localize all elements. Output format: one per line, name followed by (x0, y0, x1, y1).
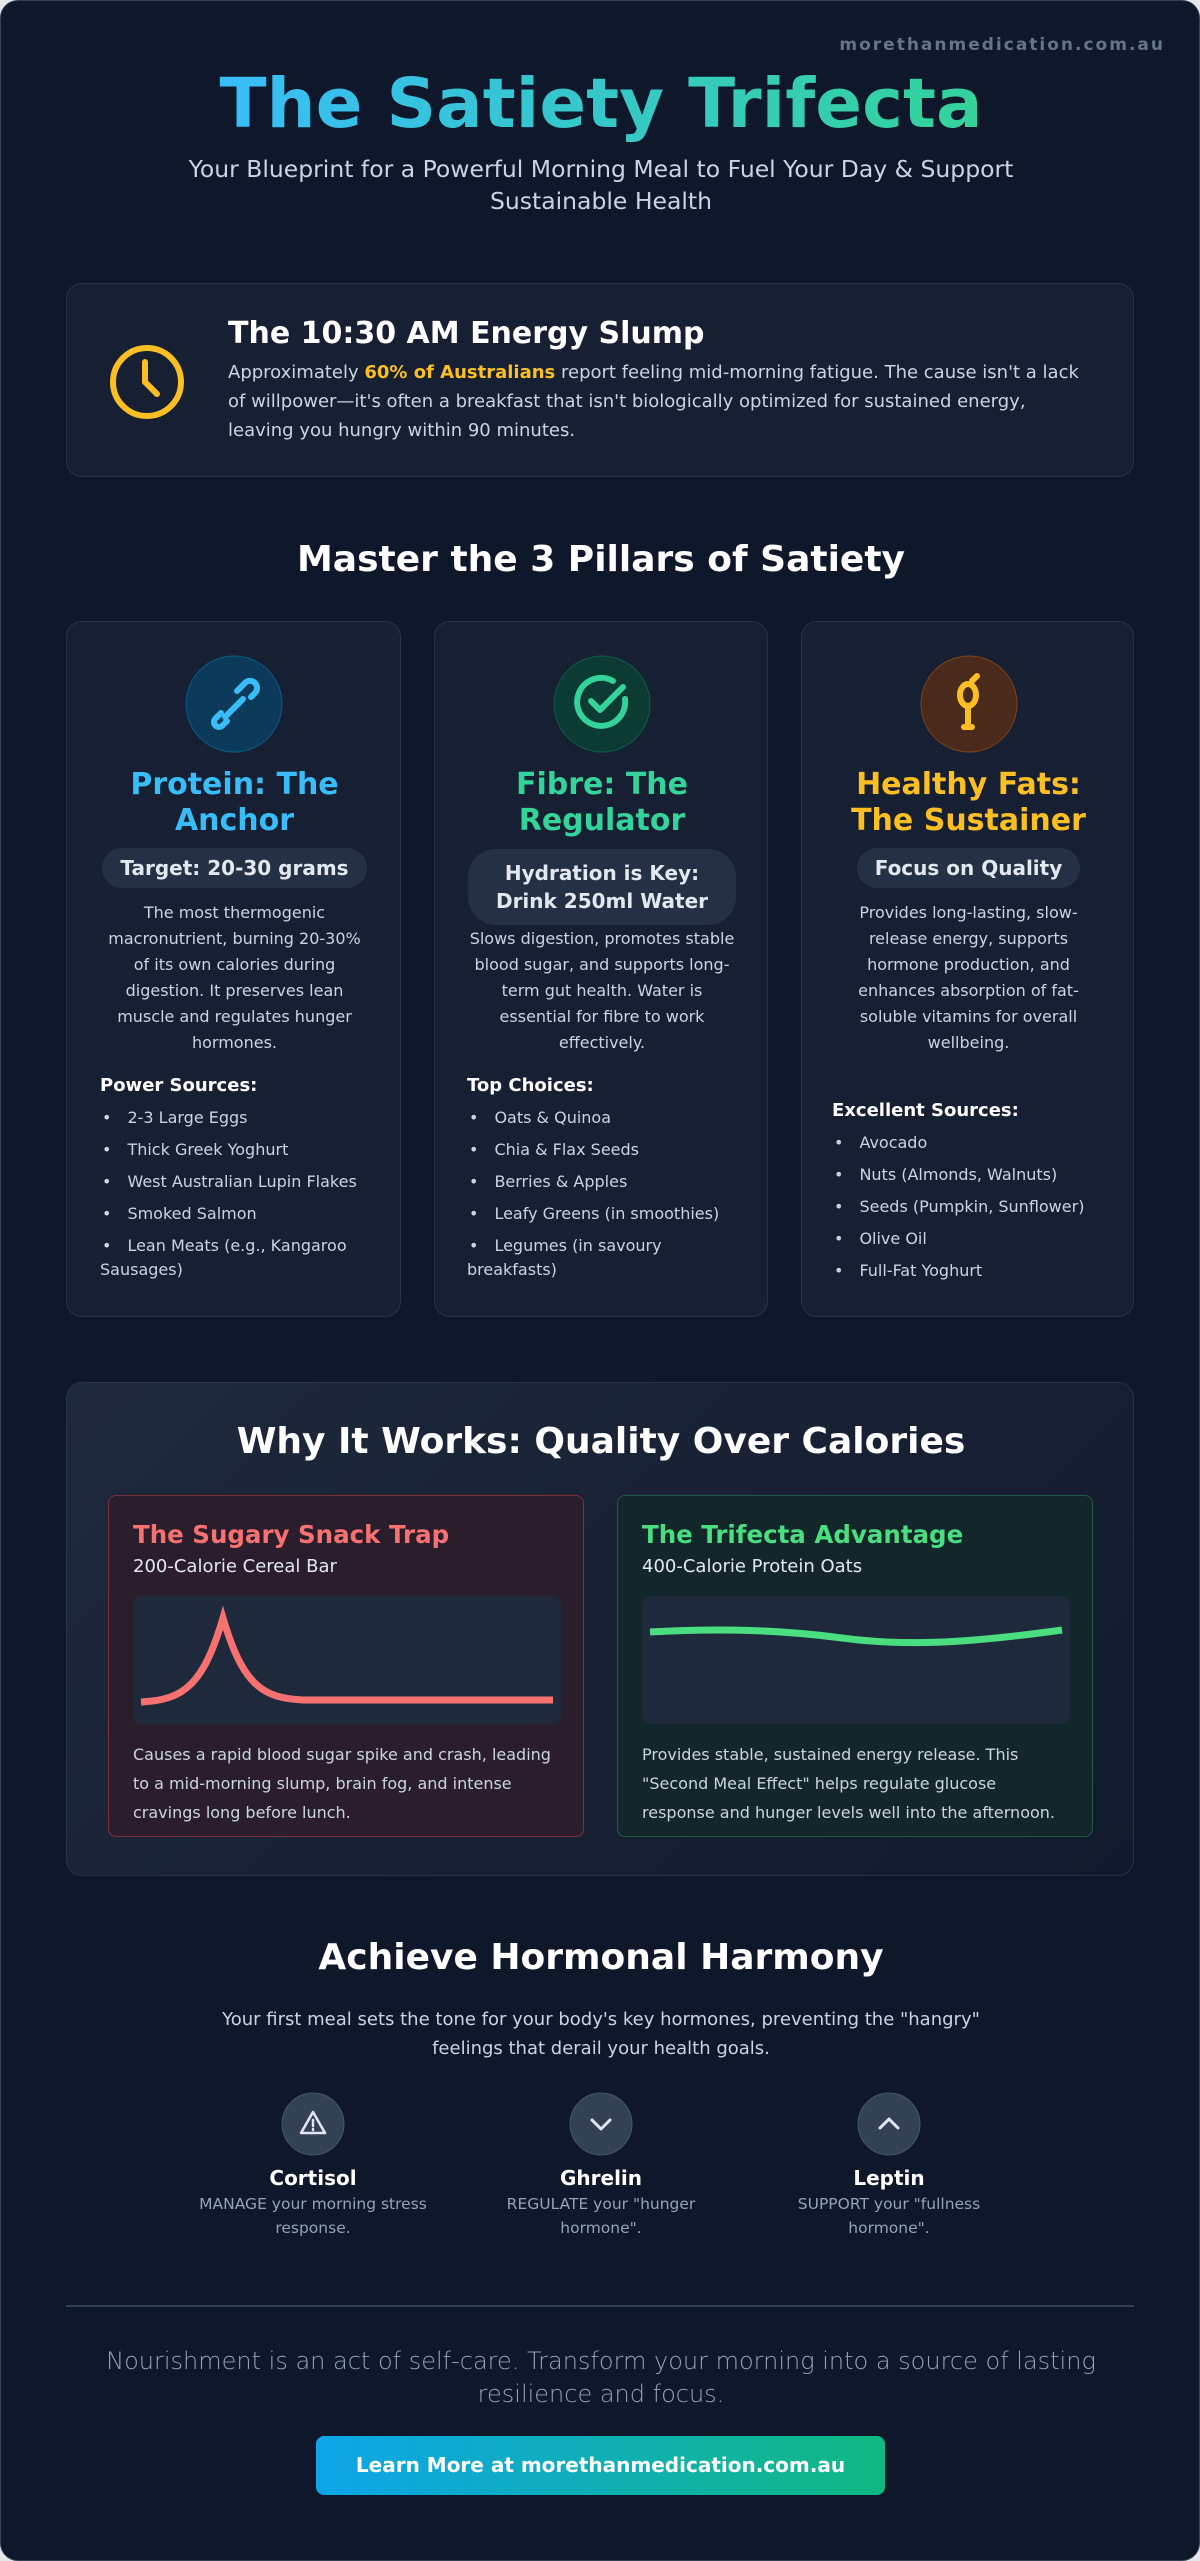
card: trifecta advantage (617, 1495, 1093, 1837)
list: Lean Meats (e.g., Kangaroo Sausages) (100, 1236, 347, 1279)
chart: stable (642, 1596, 1070, 1724)
title: The Satiety Trifecta (219, 64, 983, 144)
heading: The 10:30 AM Energy Slump (228, 316, 705, 351)
subtitle: 200-Calorie Cereal Bar (133, 1556, 337, 1577)
icon: protein (186, 656, 282, 752)
hormone: leptin: SUPPORT your "fullness hormone". (798, 2195, 980, 2237)
hormone: ghrelin (507, 2092, 696, 2237)
icon: chevron down (570, 2092, 632, 2156)
button (316, 2436, 885, 2495)
panel: fibre (434, 621, 768, 1317)
list: 2-3 Large Eggs (127, 1108, 248, 1127)
panel: fats (801, 621, 1134, 1317)
title: The Sugary Snack Trap (133, 1520, 449, 1549)
hormone: ghrelin: Ghrelin (560, 2166, 642, 2190)
list: Legumes (in savoury breakfasts) (467, 1236, 662, 1279)
list (100, 1075, 357, 1279)
list: Leafy Greens (in smoothies) (494, 1204, 719, 1223)
intro text: Your first meal sets the tone for your body's key hormones, preventing the "hangry" feelings that derail your health goals. (222, 2009, 980, 2059)
section heading: hormonal harmony: Achieve Hormonal Harmony (318, 1937, 884, 1978)
title: Fibre: The (516, 767, 688, 802)
watermark url: morethanmedication.com.au (839, 35, 1165, 55)
title (130, 767, 339, 838)
description: Provides stable, sustained energy release. This "Second Meal Effect" helps regulate glucose response and hunger levels well into the afternoon. (642, 1745, 1055, 1822)
description: The most thermogenic macronutrient, burning 20-30% of its own calories during digestion. It preserves lean muscle and regulates hunger hormones. (108, 903, 361, 1052)
pill: Target: 20-30 grams (120, 856, 349, 880)
card: sugary trap (108, 1495, 584, 1837)
heading: Why It Works: Quality Over Calories (237, 1421, 965, 1462)
list: Nuts (Almonds, Walnuts) (859, 1165, 1057, 1184)
icon: clock (110, 345, 184, 419)
title (516, 767, 688, 838)
body text: Approximately 60% of Australians report feeling mid-morning fatigue. The cause isn't a lack of willpower—it's often a breakfast that isn't biologically optimized for sustained energy, leaving you hungry within 90 minutes. (228, 362, 1079, 441)
panel: protein (66, 621, 401, 1317)
list: Olive Oil (859, 1229, 927, 1248)
list: Power Sources: (100, 1075, 257, 1096)
list: Chia & Flax Seeds (494, 1140, 639, 1159)
list: Seeds (Pumpkin, Sunflower) (859, 1197, 1084, 1216)
icon: fats (920, 656, 1018, 752)
hormone: cortisol: MANAGE your morning stress response. (199, 2195, 427, 2237)
closing text: Nourishment is an act of self-care. Transform your morning into a source of lasting resilience and focus. (106, 2347, 1096, 2408)
button: Learn More at morethanmedication.com.au (356, 2453, 845, 2477)
icon: check (554, 656, 650, 752)
list: Thick Greek Yoghurt (127, 1140, 288, 1159)
pill: Focus on Quality (875, 856, 1062, 880)
list (832, 1100, 1084, 1280)
title: Healthy Fats: (856, 767, 1081, 802)
description: Slows digestion, promotes stable blood sugar, and supports long-term gut health. Water is essential for fibre to work effectively. (470, 929, 734, 1052)
chart: spike (133, 1596, 561, 1724)
hormone: cortisol: Cortisol (269, 2166, 357, 2190)
list: West Australian Lupin Flakes (127, 1172, 357, 1191)
icon: chevron up (858, 2092, 920, 2156)
subtitle: 400-Calorie Protein Oats (642, 1556, 862, 1577)
hormone: cortisol (199, 2092, 427, 2237)
list: Avocado (859, 1133, 927, 1152)
list: Full-Fat Yoghurt (859, 1261, 982, 1280)
list: Oats & Quinoa (494, 1108, 611, 1127)
title: The Sustainer (851, 803, 1086, 838)
title: Anchor (175, 803, 294, 838)
pill: Drink 250ml Water (496, 889, 708, 913)
section heading: pillars: Master the 3 Pillars of Satiety (297, 539, 905, 580)
title: Regulator (519, 803, 685, 838)
pill: Hydration is Key: (505, 861, 699, 885)
list: Excellent Sources: (832, 1100, 1019, 1121)
list: Berries & Apples (494, 1172, 627, 1191)
description: Causes a rapid blood sugar spike and crash, leading to a mid-morning slump, brain fog, and intense cravings long before lunch. (133, 1745, 551, 1822)
panel: why it works (66, 1382, 1134, 1876)
list (467, 1075, 719, 1279)
panel: energy slump (66, 283, 1134, 477)
title: The Trifecta Advantage (642, 1520, 963, 1549)
pill (468, 849, 736, 925)
description: Provides long-lasting, slow-release energy, supports hormone production, and enhances absorption of fat-soluble vitamins for overall wellbeing. (858, 903, 1079, 1052)
hormone: leptin (798, 2092, 980, 2237)
icon: warning (282, 2092, 344, 2156)
title: Protein: The (130, 767, 339, 802)
subtitle: Your Blueprint for a Powerful Morning Meal to Fuel Your Day & Support Sustainable Health (189, 155, 1013, 215)
list: Top Choices: (467, 1075, 594, 1096)
title (851, 767, 1086, 838)
hormone: leptin: Leptin (853, 2166, 925, 2190)
list: Smoked Salmon (127, 1204, 257, 1223)
hormone: ghrelin: REGULATE your "hunger hormone". (507, 2195, 695, 2237)
